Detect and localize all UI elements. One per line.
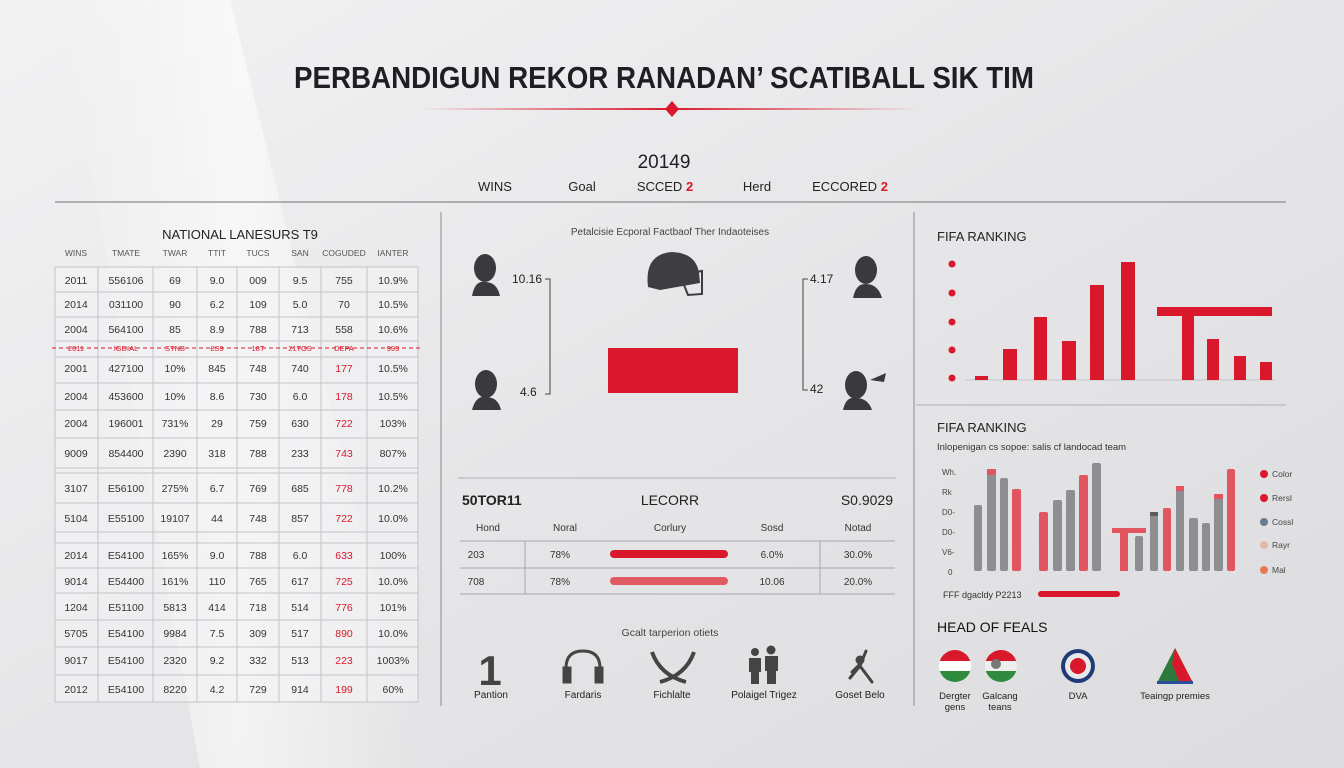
panel: national table: 857 (291, 513, 309, 525)
icon: flag badge 1 (939, 650, 971, 682)
panel: record table: Notad (845, 523, 871, 534)
panel: national table: 759 (249, 418, 267, 430)
panel: national table: 8.6 (210, 391, 224, 403)
panel: head of feals: gens (945, 702, 966, 713)
panel: national table: 2390 (163, 448, 187, 460)
panel: national table: 2004 (64, 324, 88, 336)
icon: two people (749, 646, 778, 684)
panel: national table: 223 (335, 655, 353, 667)
panel: national table: 9.0 (210, 275, 224, 287)
legend: Rayr (1272, 540, 1290, 550)
panel: national table: 722 (335, 513, 353, 525)
panel: record table: 708 (468, 577, 485, 588)
panel: national table: 60% (382, 684, 404, 696)
panel: national table: 807% (380, 448, 406, 460)
panel: national table: 2001 (64, 363, 88, 375)
panel: national table: 10.2% (378, 483, 408, 495)
panel: fifa ranking bottom chart: D0- (942, 528, 955, 537)
panel: national table: 9.2 (210, 655, 224, 667)
panel: national table: E54400 (108, 576, 144, 588)
panel: national table: 70 (338, 299, 350, 311)
panel: icon row: Gcalt tarperion otiets (622, 627, 718, 639)
left values with bracket (512, 272, 550, 399)
panel: national table: 10.0% (378, 628, 408, 640)
panel: national table: 10.6% (378, 324, 408, 336)
panel: national table: 199 (335, 684, 353, 696)
panel: national table: 564100 (108, 324, 144, 336)
right values with bracket: 42 (810, 382, 824, 396)
panel: national table: 29 (211, 418, 223, 430)
right values with bracket: 4.17 (810, 272, 834, 286)
panel: national table: 558 (335, 324, 353, 336)
panel: national table: 788 (249, 550, 267, 562)
table title: NATIONAL LANESURS T9 (162, 227, 318, 242)
icon: head top-right (853, 256, 882, 298)
panel: national table: 8.9 (210, 324, 224, 336)
panel: national table: E55100 (108, 513, 144, 525)
panel: icon row: Goset Belo (835, 690, 885, 701)
panel: fifa ranking top chart: FIFA RANKING (937, 229, 1027, 244)
left values with bracket: 4.6 (520, 385, 537, 399)
panel: national table: 2014 (64, 550, 88, 562)
dashed separator row: 21TOS (288, 344, 312, 353)
right values with bracket (803, 272, 834, 396)
panel: national table: 713 (291, 324, 309, 336)
legend: Color (1272, 469, 1292, 479)
panel: fifa ranking bottom chart: Wh. (942, 468, 956, 477)
panel: fifa ranking bottom chart: D0- (942, 508, 955, 517)
panel: national table: 318 (208, 448, 226, 460)
panel: record table: 30.0% (844, 550, 872, 561)
panel: fifa ranking bottom chart (937, 420, 1293, 600)
dashed separator row: 2011 (68, 344, 84, 353)
title: PERBANDIGUN REKOR RANADAN’ SCATIBALL SIK TIM (294, 60, 1034, 95)
panel: national table: 517 (291, 628, 309, 640)
panel: national table: E54100 (108, 684, 144, 696)
panel: national table: 748 (249, 513, 267, 525)
dashed separator row: IGDIAL (114, 344, 138, 353)
red comparison block (608, 348, 738, 393)
panel: national table: 9.0 (210, 550, 224, 562)
table header (65, 248, 409, 258)
dashed separator row: 993 (387, 344, 399, 353)
panel: head of feals: DVA (1069, 691, 1088, 702)
legend: Cossl (1272, 517, 1293, 527)
panel: national table: 414 (208, 602, 226, 614)
panel: national table: 233 (291, 448, 309, 460)
dashed separator row (52, 344, 420, 353)
panel: national table: 725 (335, 576, 353, 588)
dashed separator row: 18T (252, 344, 265, 353)
icon: head bottom-left (472, 370, 501, 410)
panel: national table: E51100 (108, 602, 144, 614)
table header: COGUDED (322, 248, 366, 258)
panel: national table: 630 (291, 418, 309, 430)
panel: head of feals: Teaingp premies (1140, 691, 1210, 702)
panel: head of feals: HEAD OF FEALS (937, 619, 1047, 635)
panel: national table: 1003% (377, 655, 409, 667)
panel: national table: 103% (380, 418, 406, 430)
panel: head of feals: teans (988, 702, 1012, 713)
panel: national table: 5104 (64, 513, 88, 525)
panel: national table: 110 (209, 576, 226, 588)
panel: national table: 427100 (108, 363, 144, 375)
panel: player comparison (472, 227, 886, 410)
icon: triangle logo (1157, 648, 1193, 684)
table header: TTIT (208, 248, 226, 258)
panel: national table: 776 (335, 602, 353, 614)
panel: record table: 6.0% (761, 550, 784, 561)
panel: national table: 514 (291, 602, 309, 614)
panel: head of feals: Galcang (982, 691, 1018, 702)
panel: national table: 69 (169, 275, 181, 287)
panel: national table: 178 (335, 391, 353, 403)
panel: national table: 740 (291, 363, 309, 375)
panel: record table: Hond (476, 523, 500, 534)
panel: icon row (474, 627, 885, 701)
panel: national table: 755 (335, 275, 353, 287)
panel: fifa ranking bottom chart: FIFA RANKING (937, 420, 1027, 435)
panel: national table: 196001 (108, 418, 144, 430)
panel: national table: 6.0 (293, 391, 307, 403)
table header: TMATE (112, 248, 140, 258)
panel: national table: 2004 (64, 418, 88, 430)
comparison subtitle: Petalcisie Ecporal Factbaof Ther Indaoteises (571, 227, 769, 238)
panel: record table: 78% (550, 550, 570, 561)
panel: national table: 556106 (108, 275, 144, 287)
panel: national table: 161% (162, 576, 188, 588)
panel: record table: 78% (550, 577, 570, 588)
icon: helmet (648, 252, 702, 295)
panel: national table: 44 (211, 513, 223, 525)
panel: national table: 90 (169, 299, 181, 311)
panel: national table: 275% (162, 483, 188, 495)
legend (1260, 469, 1293, 575)
panel: national table: 031100 (109, 299, 143, 311)
panel: national table: 8220 (163, 684, 187, 696)
panel: national table: 109 (249, 299, 267, 311)
panel: national table: 101% (380, 602, 406, 614)
table header: TUCS (246, 248, 270, 258)
panel: national table: 6.2 (210, 299, 224, 311)
panel: national table: 177 (335, 363, 353, 375)
panel: national table: 9.5 (293, 275, 307, 287)
panel: national table: 854400 (108, 448, 144, 460)
panel: record table: Noral (553, 523, 577, 534)
legend: Rersl (1272, 493, 1292, 503)
panel: national table: 85 (169, 324, 181, 336)
panel: national table: 845 (208, 363, 226, 375)
panel: national table: 5813 (163, 602, 187, 614)
panel: national table: 718 (249, 602, 267, 614)
title underline with diamond (420, 101, 920, 117)
panel: record table: LECORR (641, 492, 699, 508)
panel: national table: 1204 (64, 602, 88, 614)
panel: national table: 309 (249, 628, 267, 640)
panel: record table: Corlury (654, 523, 686, 534)
panel: national table: 788 (249, 324, 267, 336)
icon: head top-left (472, 254, 500, 296)
dashed separator row: DEPA (334, 344, 354, 353)
icon: head bottom-right (843, 371, 886, 410)
panel: icon row: Pantion (474, 690, 508, 701)
panel: fifa ranking bottom chart: Rk (942, 488, 953, 497)
panel: national table (52, 227, 420, 702)
panel: national table: 890 (335, 628, 353, 640)
panel: national table: 5.0 (293, 299, 307, 311)
dashed separator row: STNB (165, 344, 185, 353)
panel: national table: 10% (164, 391, 186, 403)
panel: national table: E54100 (108, 655, 144, 667)
table header: TWAR (163, 248, 187, 258)
panel: national table: 7.5 (210, 628, 224, 640)
dashed separator row: £S9 (210, 344, 224, 353)
summary year: 20149 (638, 152, 690, 173)
panel: national table: 748 (249, 363, 267, 375)
panel: national table: 617 (291, 576, 309, 588)
icon: club crest (1061, 649, 1095, 683)
summary stats row (478, 179, 888, 194)
panel: fifa ranking bottom chart: V6- (942, 548, 955, 557)
panel: national table: 2012 (64, 684, 88, 696)
panel: national table: 743 (335, 448, 353, 460)
panel: national table: 765 (249, 576, 267, 588)
icon: crossed swords (652, 652, 694, 682)
panel: record table: 10.06 (759, 577, 785, 588)
panel: national table: E56100 (108, 483, 144, 495)
panel: national table: E54100 (108, 550, 144, 562)
panel: national table: 332 (249, 655, 267, 667)
icon: headphones (564, 651, 602, 682)
panel: head of feals: Dergter (939, 691, 971, 702)
panel: national table: 453600 (108, 391, 144, 403)
panel: national table: 4.2 (210, 684, 224, 696)
panel: national table: 9014 (64, 576, 88, 588)
left values with bracket: 10.16 (512, 272, 542, 286)
summary stats row: SCCED 2 (637, 179, 693, 194)
panel: fifa ranking bottom chart: 0 (948, 568, 953, 577)
panel: national table: 2014 (64, 299, 88, 311)
panel: record table: 50TOR11 (462, 492, 522, 508)
panel: national table: 730 (249, 391, 267, 403)
panel: national table: 2320 (163, 655, 187, 667)
panel: national table: 722 (335, 418, 353, 430)
panel: national table: 009 (249, 275, 267, 287)
panel: record table: Sosd (761, 523, 783, 534)
panel: national table: 778 (335, 483, 353, 495)
panel: national table: 10.5% (378, 391, 408, 403)
panel: national table: 729 (249, 684, 267, 696)
panel: national table: 5705 (64, 628, 88, 640)
panel: national table: 10.5% (378, 363, 408, 375)
panel: national table: 10.0% (378, 576, 408, 588)
panel: national table: 19107 (160, 513, 190, 525)
panel: national table: 9984 (163, 628, 187, 640)
icon: number one: 1 (478, 647, 502, 694)
panel: icon row: Polaigel Trigez (731, 690, 797, 701)
panel: fifa ranking bottom chart: FFF dgacldy P2213 (943, 590, 1022, 600)
summary stats row: Herd (743, 179, 771, 194)
panel: record table: 203 (468, 550, 485, 561)
legend: Mal (1272, 565, 1286, 575)
table header: SAN (291, 248, 309, 258)
panel: fifa ranking bottom chart: Inlopenigan cs sopoe: salis cf landocad team (937, 442, 1126, 453)
table header: IANTER (377, 248, 409, 258)
panel: national table: 10.5% (378, 299, 408, 311)
panel: national table: 731% (162, 418, 188, 430)
panel: icon row: Fichlalte (653, 690, 691, 701)
panel: national table: E54100 (108, 628, 144, 640)
panel: national table: 2004 (64, 391, 88, 403)
icon: jumping player (850, 651, 872, 682)
panel: national table: 9017 (64, 655, 88, 667)
panel: national table: 685 (291, 483, 309, 495)
panel: record table (460, 492, 895, 594)
panel: fifa ranking top chart (937, 229, 1275, 382)
panel: head of feals (937, 619, 1210, 713)
panel: national table: 2011 (65, 275, 87, 287)
icon: flag badge 2 (985, 650, 1017, 682)
panel: national table: 788 (249, 448, 267, 460)
summary stats row: Goal (568, 179, 596, 194)
panel: national table: 914 (291, 684, 309, 696)
summary stats row: ECCORED 2 (812, 179, 888, 194)
panel: national table: 100% (380, 550, 406, 562)
panel: national table: 10.9% (378, 275, 408, 287)
panel: icon row: Fardaris (565, 690, 601, 701)
panel: national table: 10% (164, 363, 186, 375)
panel: record table: S0.9029 (841, 492, 893, 508)
panel: national table: 6.0 (293, 550, 307, 562)
panel: national table: 633 (335, 550, 353, 562)
panel: national table: 9009 (64, 448, 88, 460)
panel: national table: 3107 (64, 483, 88, 495)
panel: record table: 20.0% (844, 577, 872, 588)
panel: national table: 6.7 (210, 483, 224, 495)
panel: national table: 513 (291, 655, 309, 667)
panel: national table: 769 (249, 483, 267, 495)
table header: WINS (65, 248, 87, 258)
panel: national table: 165% (162, 550, 188, 562)
summary stats row: WINS (478, 179, 512, 194)
panel: national table: 10.0% (378, 513, 408, 525)
